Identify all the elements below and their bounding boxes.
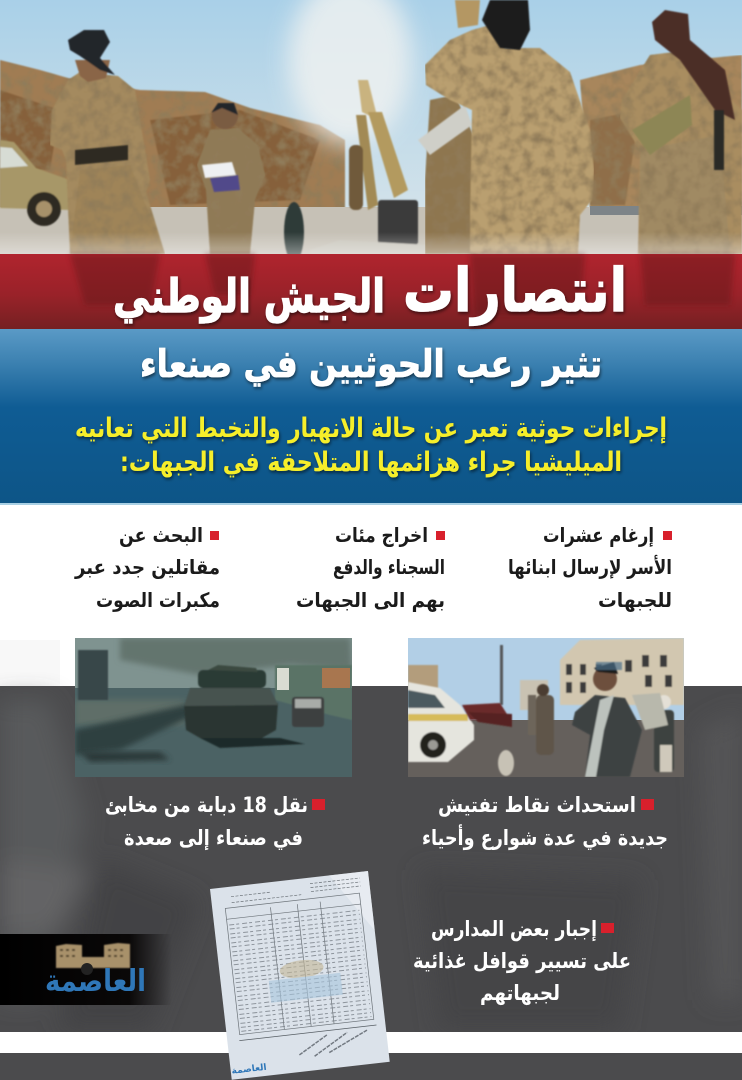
car: [292, 697, 324, 727]
soldier left: [50, 30, 165, 254]
caption: forcing schools: لجبهاتهم: [480, 981, 560, 1005]
column: forcing families: الأسر لإرسال ابنائها: [508, 554, 672, 579]
caption: forcing schools: [413, 917, 631, 1005]
panel: blue subtitle band: [0, 329, 742, 505]
document photo: [210, 871, 390, 1080]
soft grey wash on the white section: [0, 640, 60, 686]
column: searching for fighters: البحث عن: [119, 523, 203, 547]
photo: tank on street: [75, 638, 352, 777]
white van: [408, 682, 474, 762]
intro text in yellow: [75, 413, 667, 478]
caption: moving tanks: نقل 18 دبابة من مخابئ: [105, 793, 308, 817]
tank: [184, 665, 305, 748]
bullet: [312, 799, 325, 810]
bullet: [641, 799, 654, 810]
intro text in yellow: الميليشيا جراء هزائمها المتلاحقة في الجبهات:: [120, 447, 622, 478]
truck: [0, 140, 70, 226]
title: الجيش الوطني: [113, 269, 385, 323]
bullet: [436, 531, 445, 540]
building: [408, 638, 684, 710]
red car: [462, 703, 512, 727]
smoke: [288, 0, 412, 145]
column: searching for fighters: مقاتلين جدد عبر: [74, 555, 220, 579]
column: searching for fighters: مكبرات الصوت: [96, 588, 220, 612]
panel: dark lower section: [0, 686, 742, 1080]
caption: moving tanks: في صنعاء إلى صعدة: [124, 826, 303, 850]
column: searching for fighters: [74, 523, 220, 612]
column: forcing families: [508, 523, 672, 612]
soldier right: [620, 10, 742, 254]
bullet: [663, 531, 672, 540]
caption: new checkpoints: استحداث نقاط تفتيش: [438, 793, 636, 817]
logo buildings: [56, 943, 130, 968]
bullet: [601, 923, 614, 933]
column: forcing families: إرغام عشرات: [543, 523, 654, 547]
caption: new checkpoints: جديدة في عدة شوارع وأحياء: [422, 823, 668, 850]
panel: hero photo of soldiers and artillery: [0, 0, 742, 262]
soldier with rifle: [418, 95, 480, 254]
caption: new checkpoints: [422, 793, 668, 850]
caption: forcing schools: إجبار بعض المدارس: [431, 917, 597, 941]
photo: checkpoint street: [408, 638, 684, 777]
subtitle: تثير رعب الحوثيين في صنعاء: [140, 342, 602, 386]
title: [113, 256, 627, 326]
column: releasing prisoners: السجناء والدفع: [333, 555, 445, 579]
caption: moving tanks: [105, 793, 325, 850]
soldier reading: [197, 103, 265, 254]
title: انتصارات: [403, 256, 627, 326]
document photo: العاصمة: [231, 1063, 267, 1077]
column: releasing prisoners: اخراج مئات: [335, 523, 428, 547]
panel: red title band: [0, 254, 742, 329]
soldier large centre: [425, 0, 594, 254]
men: [498, 662, 674, 777]
column: releasing prisoners: [296, 523, 445, 612]
caption: forcing schools: على تسيير قوافل غذائية: [413, 949, 631, 973]
logo wordmark: العاصمة: [45, 964, 146, 999]
bullet: [210, 531, 219, 540]
column: forcing families: للجبهات: [598, 588, 672, 612]
artillery: [283, 79, 419, 254]
column: releasing prisoners: بهم الى الجبهات: [296, 588, 445, 612]
logo block: [0, 934, 172, 1005]
